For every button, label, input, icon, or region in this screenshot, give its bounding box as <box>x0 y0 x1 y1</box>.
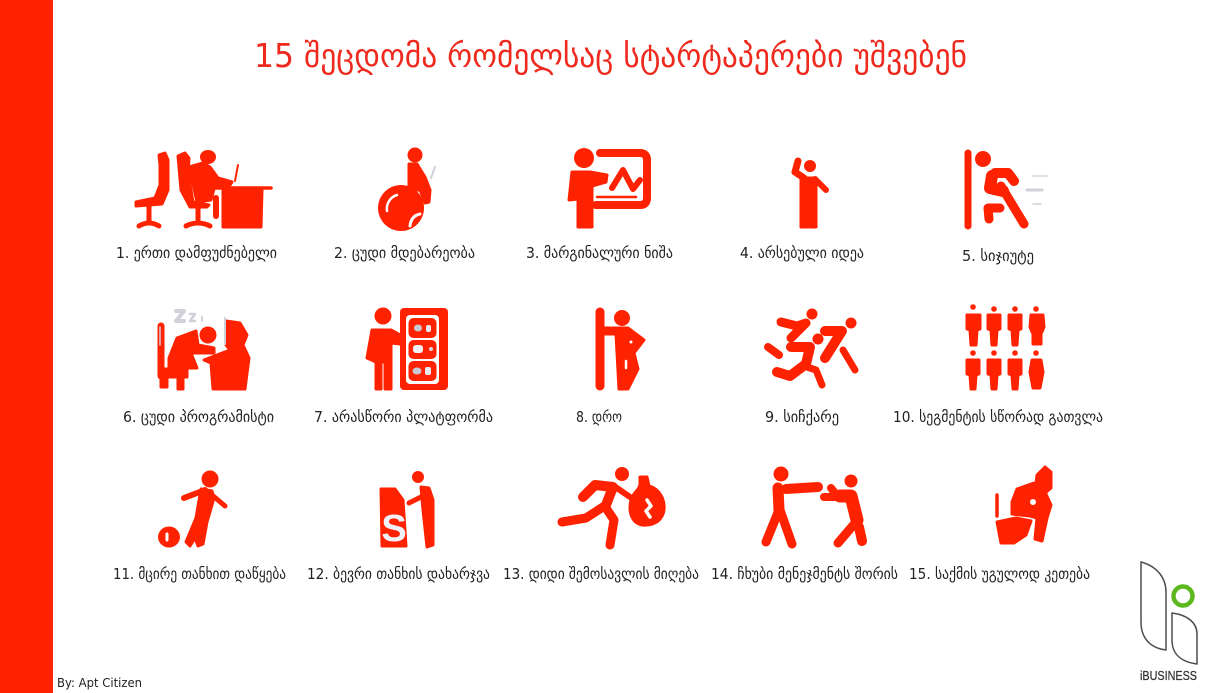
item 2: bad location <box>334 148 475 262</box>
item 13: big revenue <box>503 467 699 583</box>
logo: iBusiness <box>1140 562 1197 683</box>
label 11: 11. მცირე თანხით დაწყება <box>113 565 286 583</box>
logo mark <box>1141 562 1197 664</box>
icon: crowd of eight figures <box>967 304 1044 389</box>
icon: person leaning on post <box>600 310 644 389</box>
icon: person kicking small coin <box>158 470 225 548</box>
item 6: bad programmer <box>123 311 274 426</box>
item 14: fight between management <box>711 466 898 583</box>
label 8: 8. დრო <box>576 408 622 426</box>
icon: person pushing into wall <box>968 151 1047 226</box>
icon: person on globe <box>378 148 435 231</box>
icon detail: dollar letter on bag: S <box>381 508 407 550</box>
item 3: marginal niche <box>526 148 673 262</box>
item 4: existing idea <box>740 160 864 262</box>
item 5: stubbornness <box>962 151 1047 265</box>
item 15: doing work half-heartedly <box>909 467 1090 583</box>
label 5: 5. სიჯიუტე <box>962 247 1034 265</box>
icon: person scratching head <box>795 160 826 227</box>
label 10: 10. სეგმენტის სწორად გათვლა <box>893 408 1103 426</box>
icon: two chairs, founder at desk <box>136 150 271 227</box>
item 8: time <box>576 310 644 426</box>
label 15: 15. საქმის უგულოდ კეთება <box>909 565 1090 583</box>
icon: person running with money sack <box>562 467 664 545</box>
item 11: starting with little money <box>113 470 286 583</box>
item 12: spending much money <box>307 471 490 583</box>
icon: person with phone app <box>367 308 448 390</box>
label 2: 2. ცუდი მდებარეობა <box>334 244 475 262</box>
label 3: 3. მარგინალური ნიშა <box>526 244 673 262</box>
source credit: By: Apt Citizen <box>57 675 142 690</box>
label 1: 1. ერთი დამფუძნებელი <box>116 244 277 262</box>
label 9: 9. სიჩქარე <box>765 408 839 426</box>
label 6: 6. ცუდი პროგრამისტი <box>123 408 274 426</box>
item 1: one founder <box>116 150 277 262</box>
item 7: wrong platform <box>314 308 493 426</box>
icon: person with money bag <box>381 471 433 550</box>
item 10: segment calculation <box>893 304 1103 426</box>
label 12: 12. ბევრი თანხის დახარჯვა <box>307 565 490 583</box>
label 13: 13. დიდი შემოსავლის მიღება <box>503 565 699 583</box>
icon: presenter at chart board <box>569 148 647 227</box>
label 14: 14. ჩხუბი მენეჯმენტს შორის <box>711 565 898 583</box>
red sidebar <box>0 0 53 693</box>
label 4: 4. არსებული იდეა <box>740 244 864 262</box>
icon: slumped person <box>997 467 1051 543</box>
icon: two fighters <box>766 466 862 544</box>
item 9: speed <box>765 308 856 426</box>
label 7: 7. არასწორი პლატფორმა <box>314 408 493 426</box>
icon: three runners <box>768 308 856 385</box>
logo wordmark: iBUSINESS <box>1140 668 1197 683</box>
title: 15 შეცდომა რომელსაც სტარტაპერები უშვებენ <box>254 36 967 75</box>
icon: sleeping programmer <box>160 311 249 389</box>
